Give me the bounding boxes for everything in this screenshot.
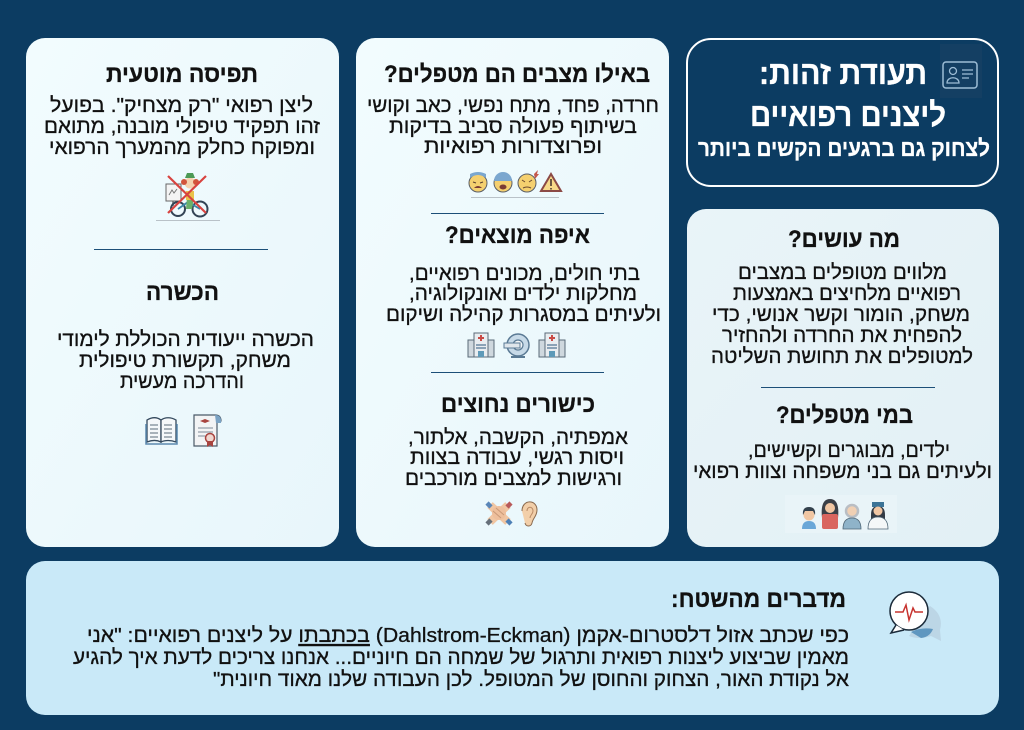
text block: what they do: להפחית את החרדה ולהחזיר	[722, 324, 962, 347]
text block: training: והדרכה מעשית	[120, 370, 244, 393]
heading: training: הכשרה	[146, 279, 219, 306]
text block: training: הכשרה ייעודית הכוללת לימודי	[57, 328, 314, 351]
icon: open book	[146, 418, 177, 444]
text block: situations	[367, 94, 659, 158]
panel: title card	[687, 39, 998, 186]
heading: what they do: מה עושים?	[788, 226, 900, 253]
text block: locations	[386, 262, 661, 326]
icon: joined hands	[487, 503, 511, 524]
icon row: hospitals and MRI scanner	[468, 333, 565, 357]
text block: what they do: מלווים מטופלים במצבים	[738, 261, 947, 284]
heading: locations: איפה מוצאים?	[445, 222, 590, 249]
text block: misconception: זהו תפקיד טיפולי מובנה, מתואם	[44, 115, 320, 138]
text block: skills: אמפתיה, הקשבה, אלתור,	[408, 426, 628, 449]
panel: situations, locations and skills	[356, 38, 669, 547]
text block: quote: מאמין שביצוע ליצנות רפואית ותרגול של שמחה הם חיוניים... אנחנו צריכים לדעת איך להגיע	[73, 646, 849, 669]
title: תעודת זהות:	[759, 54, 927, 91]
icon: ear	[522, 502, 537, 526]
text block: training: משחק, תקשורת טיפולית	[79, 349, 291, 372]
text block: situations: ופרוצדורות רפואיות	[424, 135, 602, 158]
icon: crossed-out clown on bicycle	[156, 173, 220, 220]
text block: skills	[405, 426, 628, 490]
heading: from the field: מדברים מהשטח:	[671, 586, 846, 613]
heading: misconception: תפיסה מוטעית	[106, 61, 258, 88]
text block: quote	[73, 624, 849, 691]
icon: speech bubbles with heartbeat	[890, 592, 941, 641]
icon: diploma with ribbon	[194, 415, 221, 447]
text block: locations: מחלקות ילדים ואונקולוגיה,	[409, 282, 637, 305]
text block: quote: כפי שכתב אזול דלסטרום-אקמן (Dahlstrom-Eckman) בכתבתו על ליצנים רפואיים: "אני	[87, 624, 849, 647]
icon row: child, woman, elder and doctor	[785, 495, 897, 533]
heading: skills: כישורים נחוצים	[441, 391, 595, 418]
text block: what they do	[711, 261, 973, 368]
text block: skills: ויסות רגשי, עבודה בצוות	[410, 446, 624, 469]
text block: skills: ורגישות למצבים מורכבים	[405, 467, 622, 490]
heading: situations: באילו מצבים הם מטפלים?	[384, 61, 650, 88]
icon: identity card	[940, 44, 982, 98]
title: ליצנים רפואיים	[750, 96, 946, 133]
title: לצחוק גם ברגעים הקשים ביותר	[698, 135, 990, 161]
panel: what they do and who they treat	[687, 209, 999, 547]
title	[698, 54, 990, 161]
text block: misconception	[44, 94, 320, 159]
text block: who they treat: ולעיתים גם בני משפחה וצוות רפואי	[693, 460, 992, 483]
text block: locations: בתי חולים, מכונים רפואיים,	[409, 262, 640, 285]
text block: misconception: ליצן רפואי "רק מצחיק". בפועל	[50, 94, 313, 117]
text block: locations: ולעיתים במסגרות קהילה ושיקום	[386, 303, 661, 326]
icon row: anxious faces and warning sign	[469, 170, 561, 198]
text block: training	[57, 328, 314, 393]
text block: quote: אל נקודת האור, הצחוק והחוסן של המטופל. לכן העבודה שלנו מאוד חיונית"	[213, 668, 849, 691]
text block: who they treat: ילדים, מבוגרים וקשישים,	[748, 439, 950, 462]
text block: what they do: רפואיים מלחיצים באמצעות	[733, 282, 961, 305]
panel: quote from the field	[26, 561, 999, 715]
text block: situations: בשיתוף פעולה סביב בדיקות	[389, 115, 637, 138]
text block: situations: חרדה, פחד, מתח נפשי, כאב וקושי	[367, 94, 659, 117]
text block: what they do: למטופלים את תחושת השליטה	[711, 345, 973, 368]
text block: misconception: ומפוקח כחלק מהמערך הרפואי	[49, 136, 315, 159]
text block: who they treat	[693, 439, 992, 483]
text block: what they do: משחק, הומור וקשר אנושי, כדי	[712, 303, 970, 326]
panel: misconception and training	[26, 38, 339, 547]
heading: who they treat: במי מטפלים?	[776, 402, 913, 429]
